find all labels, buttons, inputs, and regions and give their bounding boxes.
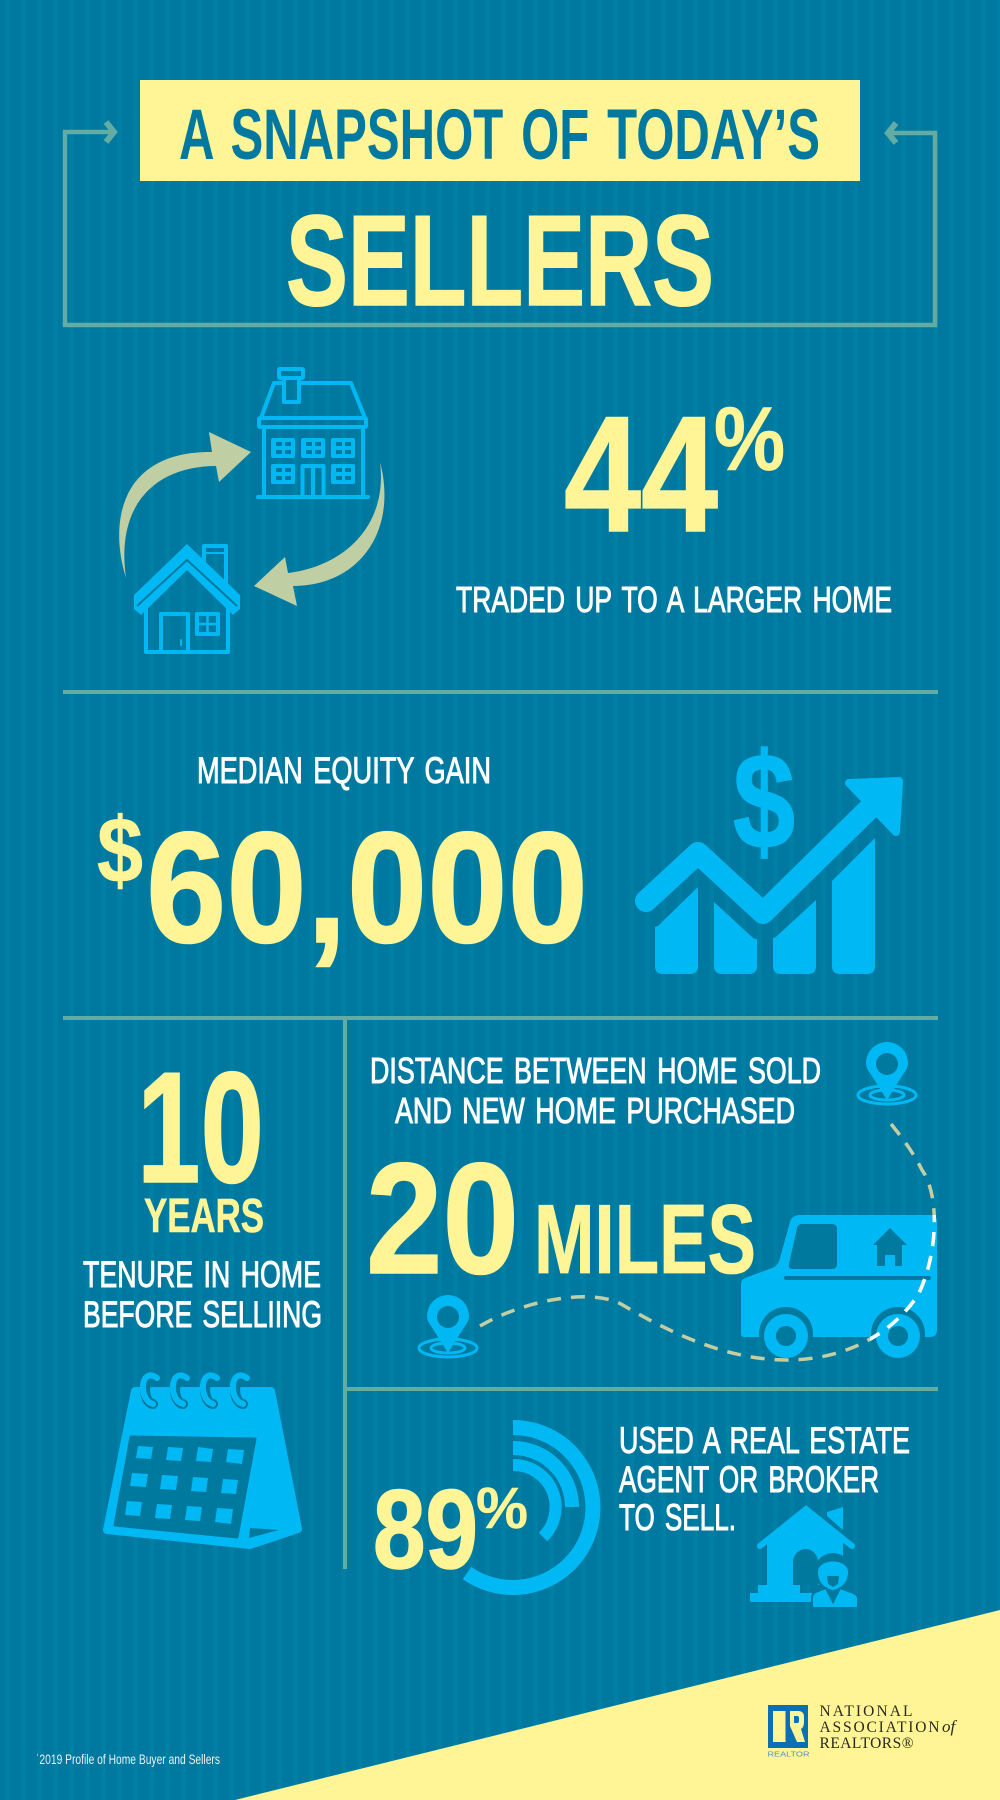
percent sign: %	[714, 390, 785, 490]
heading: median equity gain: MEDIAN EQUITY GAIN	[197, 750, 491, 791]
icon: curved arrow to small house	[254, 462, 384, 606]
route dashed line	[480, 1119, 934, 1360]
statistic: 60,000 dollars: 60,000	[146, 800, 588, 976]
title frame with arrows	[65, 122, 935, 325]
statistic: 89 percent: 89	[373, 1467, 478, 1592]
caption: tenure	[83, 1253, 322, 1335]
panel: distance	[366, 1042, 937, 1361]
panel: traded up	[119, 369, 892, 652]
caption: agent usage: TO SELL.	[619, 1497, 736, 1538]
caption: agent usage: AGENT OR BROKER	[619, 1459, 879, 1500]
logo wordmark	[820, 1703, 958, 1752]
title	[65, 80, 935, 333]
yellow corner banner	[235, 1610, 1000, 1800]
logo wordmark: NATIONAL	[820, 1703, 912, 1720]
divider three	[345, 1387, 938, 1391]
logo wordmark: ASSOCIATION	[820, 1719, 940, 1736]
footnote: ˈ2019 Profile of Home Buyer and Sellers	[36, 1752, 220, 1767]
icon: rising chart with dollar	[646, 725, 899, 974]
icon: houses with cycle arrows	[119, 369, 384, 652]
icon: curved arrow to large house	[119, 432, 251, 578]
statistic: 20 miles	[366, 1131, 756, 1307]
radial gauge	[467, 1428, 593, 1587]
statistic: 89 percent: %	[476, 1476, 528, 1541]
icon: moving van	[741, 1215, 937, 1361]
icon: small house	[134, 544, 240, 652]
statistic: 60,000 dollars: $	[97, 798, 143, 902]
van house logo	[873, 1228, 907, 1266]
heading: distance: DISTANCE BETWEEN HOME SOLD	[370, 1050, 821, 1091]
vertical divider	[343, 1018, 347, 1569]
caption: tenure: TENURE IN HOME	[83, 1253, 321, 1295]
icon: origin pin	[419, 1295, 477, 1357]
calendar rings	[143, 1375, 247, 1404]
panel: tenure	[83, 1040, 322, 1545]
panel: equity gain	[97, 725, 899, 976]
divider one	[63, 690, 938, 694]
title line two: SELLERS	[286, 189, 714, 333]
logo mark	[768, 1705, 810, 1758]
statistic: 20 miles: MILES	[534, 1184, 756, 1294]
logo mark: REALTOR	[768, 1750, 810, 1758]
calendar day cells	[125, 1446, 244, 1524]
panel: agent usage	[373, 1420, 910, 1608]
title banner	[140, 80, 860, 181]
statistic: 44 percent: 44	[564, 382, 718, 566]
caption: tenure: BEFORE SELLIING	[83, 1293, 322, 1335]
dollar sign: $	[733, 725, 795, 877]
logo wordmark: of	[942, 1717, 958, 1736]
icon: large house	[258, 369, 368, 497]
divider two	[63, 1016, 938, 1020]
icon: house with agent	[750, 1507, 858, 1608]
chart trend arrow	[646, 806, 872, 913]
statistic: 10 years	[137, 1040, 264, 1243]
caption: agent usage	[619, 1420, 910, 1538]
statistic: 20 miles: 20	[366, 1131, 519, 1307]
statistic: 10 years: YEARS	[144, 1190, 264, 1243]
heading: distance	[370, 1050, 821, 1131]
icon: destination pin	[858, 1042, 916, 1104]
icon: desk calendar	[107, 1375, 298, 1545]
statistic: 10 years: 10	[137, 1040, 264, 1216]
chart bars	[655, 838, 875, 974]
logo: National Association of Realtors	[768, 1703, 958, 1758]
logo wordmark: REALTORS®	[820, 1735, 914, 1752]
heading: distance: AND NEW HOME PURCHASED	[395, 1090, 795, 1131]
